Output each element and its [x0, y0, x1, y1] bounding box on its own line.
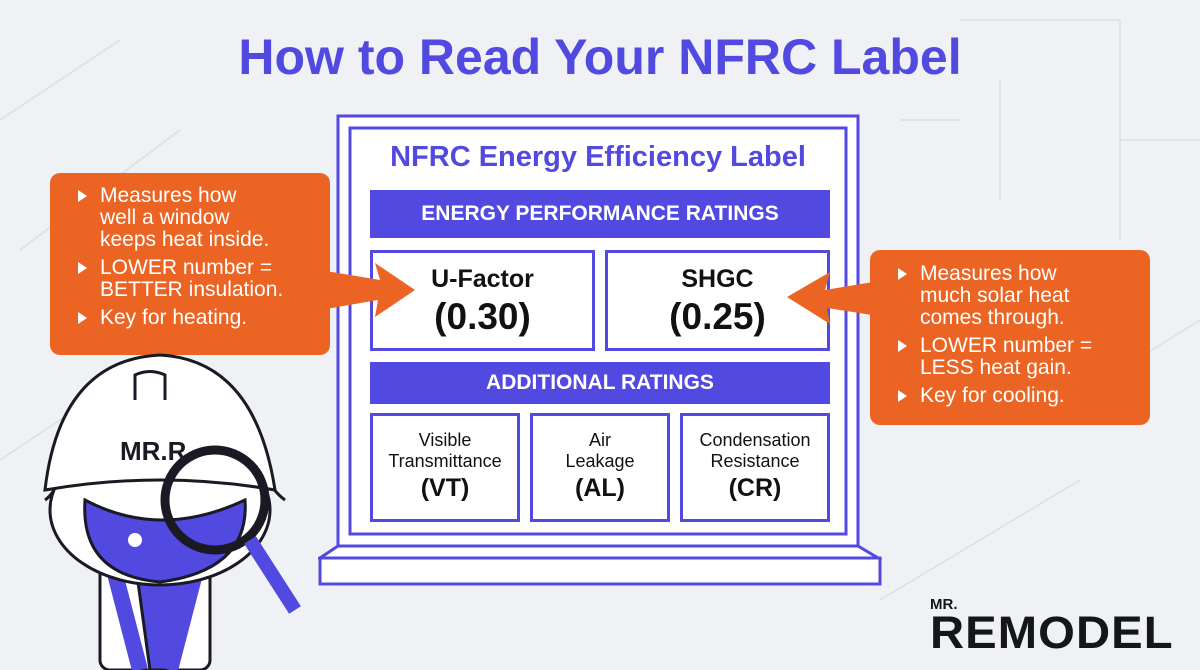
bar: energy performance ratings — [370, 190, 830, 238]
box: AL: Leakage — [565, 451, 635, 471]
box: CR: (CR) — [729, 474, 781, 502]
callout: U-Factor explanation: Key for heating. — [100, 306, 247, 329]
box: U-Factor — [370, 250, 595, 351]
callout: SHGC explanation: LESS heat gain. — [920, 356, 1072, 379]
callout: SHGC explanation — [870, 250, 1150, 425]
mascot: Mr. R robot with magnifier — [43, 354, 301, 670]
logo: Mr. Remodel: REMODEL — [930, 607, 1174, 658]
box: U-Factor: U-Factor — [431, 265, 534, 293]
bar: additional ratings — [370, 362, 830, 404]
callout: U-Factor explanation — [50, 173, 330, 355]
box: U-Factor: (0.30) — [434, 296, 531, 337]
callout: U-Factor explanation: Measures how — [100, 184, 237, 207]
callout: SHGC explanation: comes through. — [920, 306, 1065, 329]
callout: U-Factor explanation: LOWER number = — [100, 256, 272, 279]
box: AL: (AL) — [575, 474, 625, 502]
box: VT — [370, 413, 520, 522]
box: VT: Transmittance — [388, 451, 502, 471]
box: CR: Condensation — [699, 430, 811, 450]
callout: SHGC explanation: Measures how — [920, 262, 1057, 285]
box: CR — [680, 413, 830, 522]
callout: SHGC explanation: much solar heat — [920, 284, 1069, 307]
box: CR: Resistance — [710, 451, 800, 471]
bar: energy performance ratings: ENERGY PERFORMANCE RATINGS — [421, 202, 779, 225]
title: How to Read Your NFRC Label — [238, 29, 962, 85]
box: SHGC: SHGC — [681, 265, 754, 293]
callout: U-Factor explanation: keeps heat inside. — [100, 228, 269, 251]
box: AL — [530, 413, 670, 522]
label heading: NFRC Energy Efficiency Label — [390, 141, 806, 173]
callout: SHGC explanation: Key for cooling. — [920, 384, 1065, 407]
box: AL: Air — [589, 430, 611, 450]
panel: window label frame — [318, 114, 882, 586]
box: VT: Visible — [419, 430, 471, 450]
box: VT: (VT) — [421, 474, 469, 502]
callout: SHGC explanation: LOWER number = — [920, 334, 1092, 357]
callout: U-Factor explanation: BETTER insulation. — [100, 278, 283, 301]
callout: U-Factor explanation: well a window — [100, 206, 230, 229]
arrow: left callout to U-Factor — [330, 263, 415, 317]
bar: additional ratings: ADDITIONAL RATINGS — [486, 371, 714, 394]
box: SHGC — [605, 250, 830, 351]
arrow: right callout to SHGC — [787, 272, 870, 324]
logo: Mr. Remodel: MR. — [930, 596, 958, 613]
box: SHGC: (0.25) — [669, 296, 766, 337]
mascot: Mr. R robot with magnifier: MR.R — [120, 436, 187, 466]
